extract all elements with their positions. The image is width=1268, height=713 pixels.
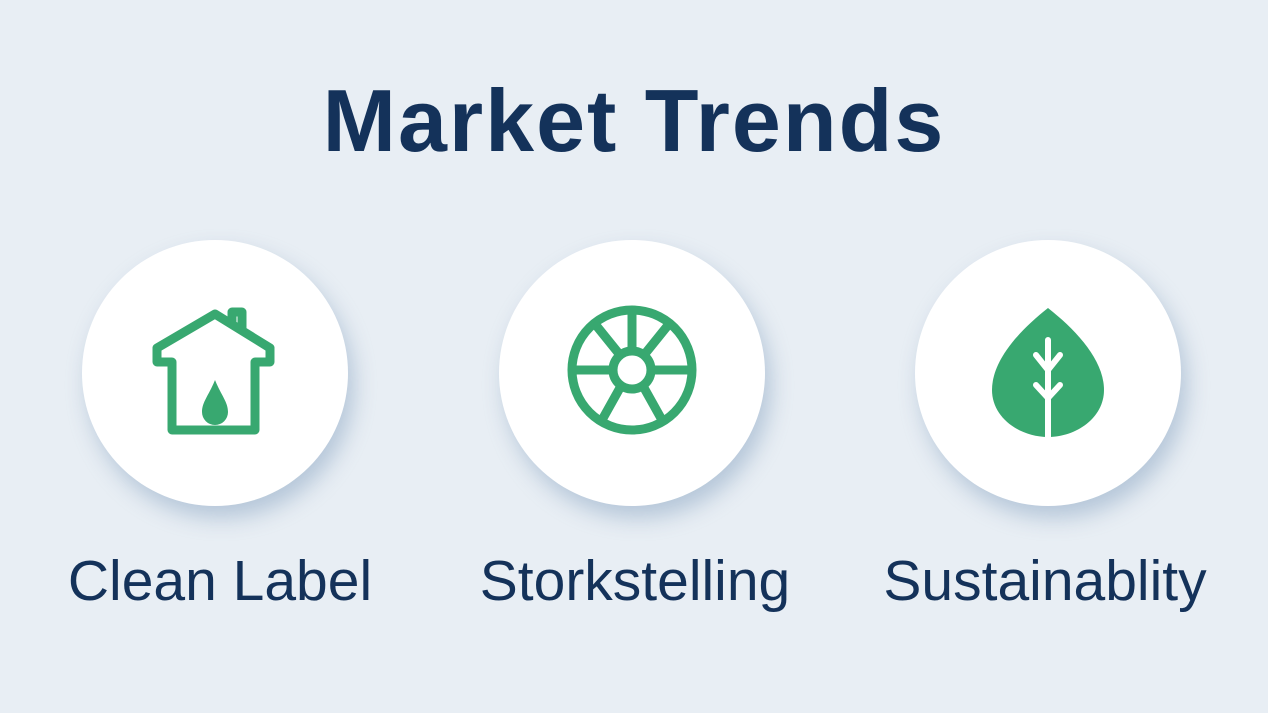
label: clean label: Clean Label (68, 549, 372, 613)
title: Market Trends (323, 71, 945, 170)
label: storytelling: Storkstelling (480, 549, 790, 613)
panel: clean label (82, 240, 348, 506)
icon: house with drop (152, 308, 274, 434)
panel: storytelling (499, 240, 765, 506)
icon: wheel (568, 306, 696, 434)
label: sustainability: Sustainablity (883, 549, 1207, 613)
panel: sustainability (915, 240, 1181, 506)
icon: leaf (992, 308, 1104, 437)
